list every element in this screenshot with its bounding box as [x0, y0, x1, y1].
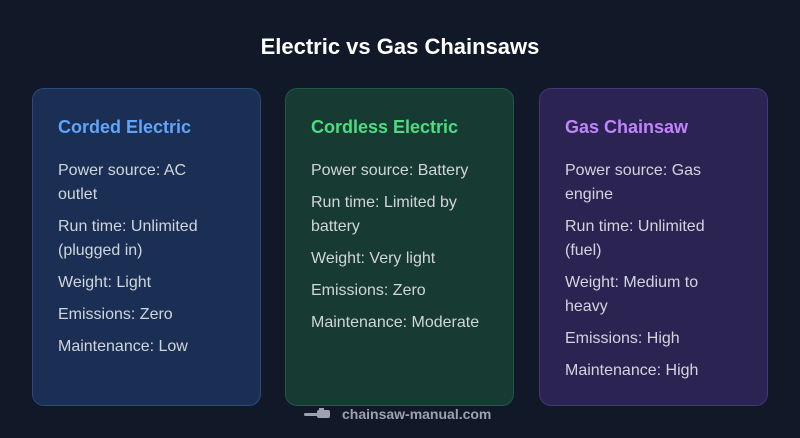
text block: corded specs: Power source: AC outlet — [58, 162, 186, 203]
text block: corded specs: Weight: Light — [58, 274, 151, 291]
text block: cordless specs: Weight: Very light — [311, 250, 435, 267]
text block: corded specs: Maintenance: Low — [58, 338, 188, 355]
text block: gas specs — [565, 162, 705, 379]
footer: chainsaw-manual.com — [342, 406, 491, 422]
panel: gas chainsaw — [539, 88, 768, 406]
text block: corded specs — [58, 162, 198, 355]
text block: cordless specs: Power source: Battery — [311, 162, 468, 179]
text block: cordless specs: Maintenance: Moderate — [311, 314, 479, 331]
heading: corded: Corded Electric — [58, 117, 191, 137]
text block: gas specs: Power source: Gas engine — [565, 162, 701, 203]
text block: corded specs: Emissions: Zero — [58, 306, 173, 323]
title: Electric vs Gas Chainsaws — [261, 34, 539, 59]
heading: cordless: Cordless Electric — [311, 117, 458, 137]
panel: cordless electric — [285, 88, 514, 406]
heading: gas: Gas Chainsaw — [565, 117, 688, 137]
text block: gas specs: Maintenance: High — [565, 362, 698, 379]
text block: gas specs: Run time: Unlimited (fuel) — [565, 218, 705, 259]
text block: cordless specs: Emissions: Zero — [311, 282, 426, 299]
text block: corded specs: Run time: Unlimited (plugged in) — [58, 218, 198, 259]
text block: gas specs: Emissions: High — [565, 330, 680, 347]
text block: gas specs: Weight: Medium to heavy — [565, 274, 698, 315]
text block: cordless specs: Run time: Limited by battery — [311, 194, 457, 235]
icon: chainsaw — [304, 408, 330, 418]
panel: corded electric — [32, 88, 261, 406]
text block: cordless specs — [311, 162, 479, 331]
